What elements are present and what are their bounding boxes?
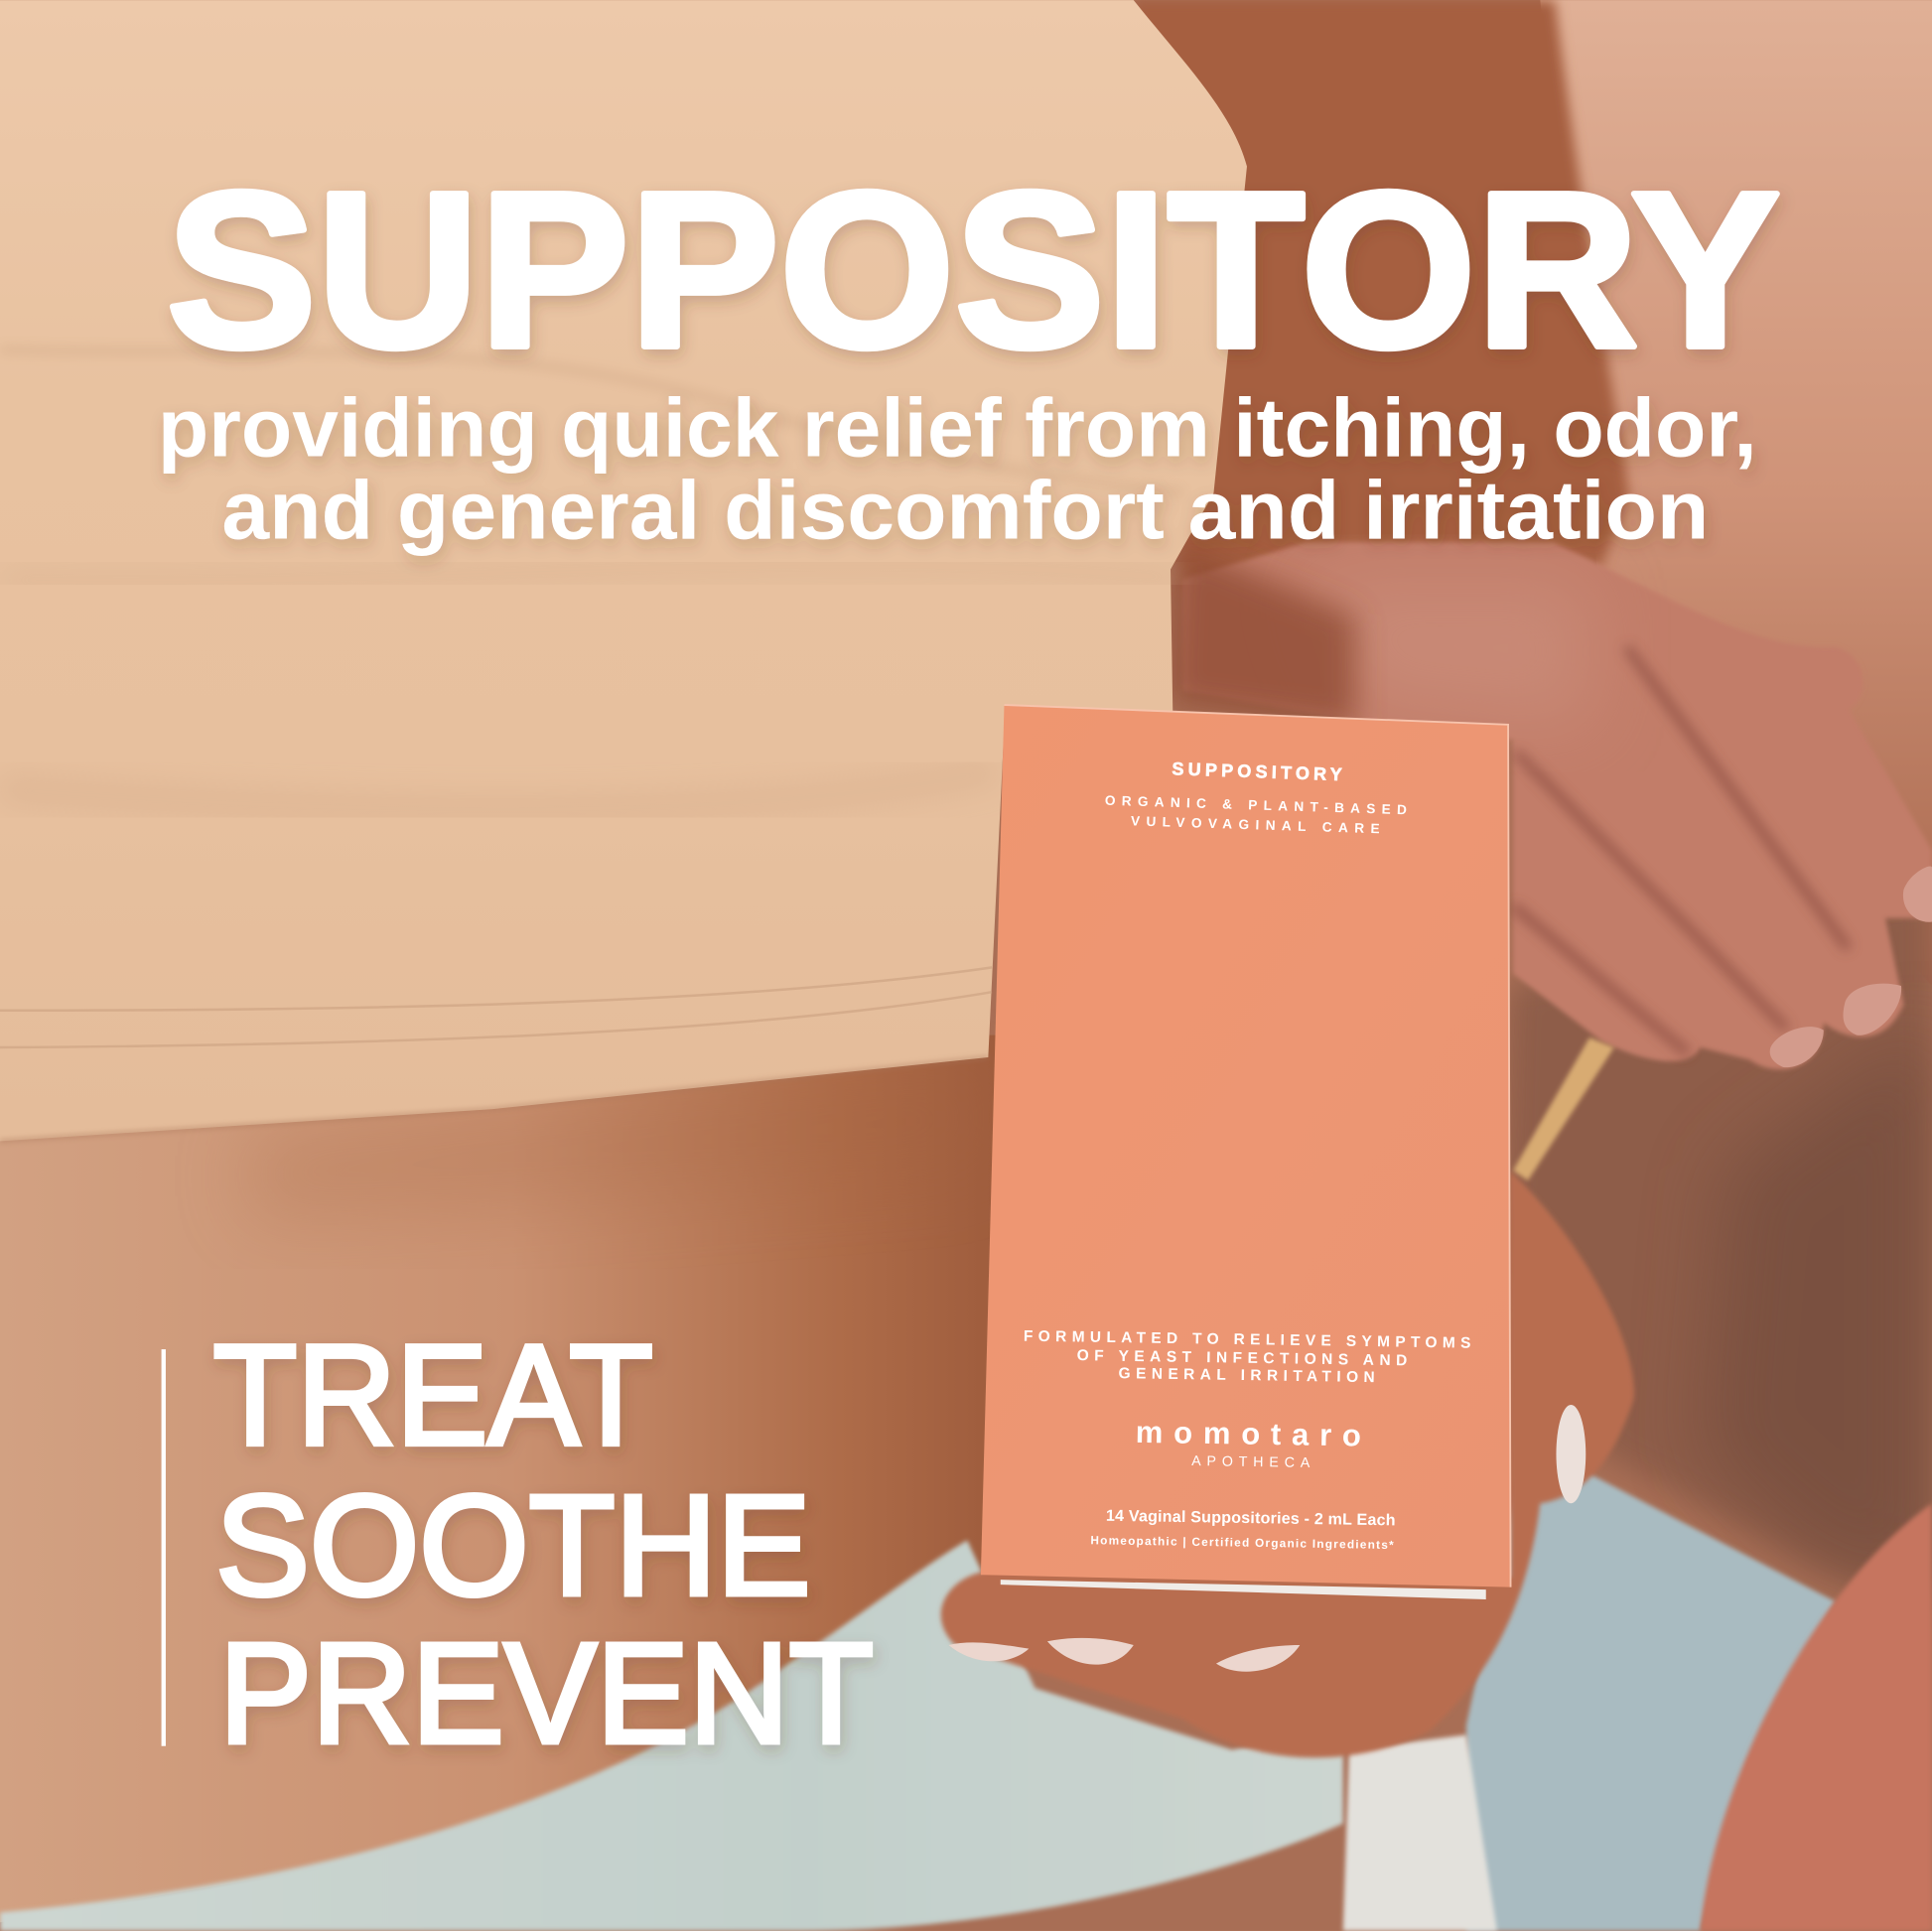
dark wrist behind box (1171, 542, 1355, 727)
beige tank top (0, 0, 1247, 1141)
finger nails on hip (1770, 867, 1932, 1067)
white pocket lining (1343, 1735, 1497, 1931)
thumb nail (1556, 1405, 1586, 1503)
forearm lower right (1701, 1503, 1932, 1931)
box subtitle: VULVOVAGINAL CARE (1131, 813, 1380, 836)
lower belly skin (0, 1035, 1023, 1922)
tank lower hem (0, 967, 992, 1047)
box under-flap (1001, 1580, 1486, 1599)
body hair shading (1701, 1023, 1932, 1589)
benefits list: PREVENT (219, 1613, 874, 1773)
box quantity: 14 Vaginal Suppositories - 2 mL Each (1106, 1507, 1396, 1529)
gold strap (1513, 1037, 1614, 1180)
underwear (0, 1540, 1343, 1931)
subtitle: and general discomfort and irritation (221, 464, 1709, 556)
box brand: momotaro (1136, 1415, 1361, 1452)
denim jeans (1466, 1442, 1836, 1931)
box claim: OF YEAST INFECTIONS AND (1077, 1347, 1407, 1369)
finger creases (1513, 647, 1849, 1053)
title: SUPPOSITORY (167, 147, 1780, 394)
subtitle (158, 381, 1757, 556)
box claim (1023, 1328, 1471, 1388)
right torso skin (1540, 0, 1932, 986)
box brand sub-line: APOTHECA (1191, 1453, 1311, 1471)
finger nails (949, 1638, 1300, 1672)
box claim: FORMULATED TO RELIEVE SYMPTOMS (1024, 1328, 1471, 1352)
box certification: Homeopathic | Certified Organic Ingredients* (1090, 1534, 1394, 1552)
benefits list: SOOTHE (215, 1465, 811, 1625)
box subtitle (1104, 793, 1407, 837)
shadow under tank hem (246, 1057, 988, 1220)
box claim: GENERAL IRRITATION (1118, 1365, 1375, 1386)
hand holding box (941, 1171, 1634, 1757)
box title: SUPPOSITORY (1172, 759, 1342, 784)
lower right thigh (1503, 888, 1932, 1602)
dark arm (1134, 0, 1629, 592)
knuckle highlight (1307, 579, 1589, 727)
benefits list (213, 1315, 874, 1773)
divider line beside benefits (162, 1349, 166, 1746)
box subtitle: ORGANIC & PLANT-BASED (1105, 793, 1407, 817)
product box (981, 705, 1511, 1587)
tank fold shadows (0, 350, 1182, 493)
benefits list: TREAT (213, 1315, 653, 1475)
subtitle: providing quick relief from itching, odor, (158, 381, 1757, 474)
hand on hip (1182, 542, 1932, 1069)
